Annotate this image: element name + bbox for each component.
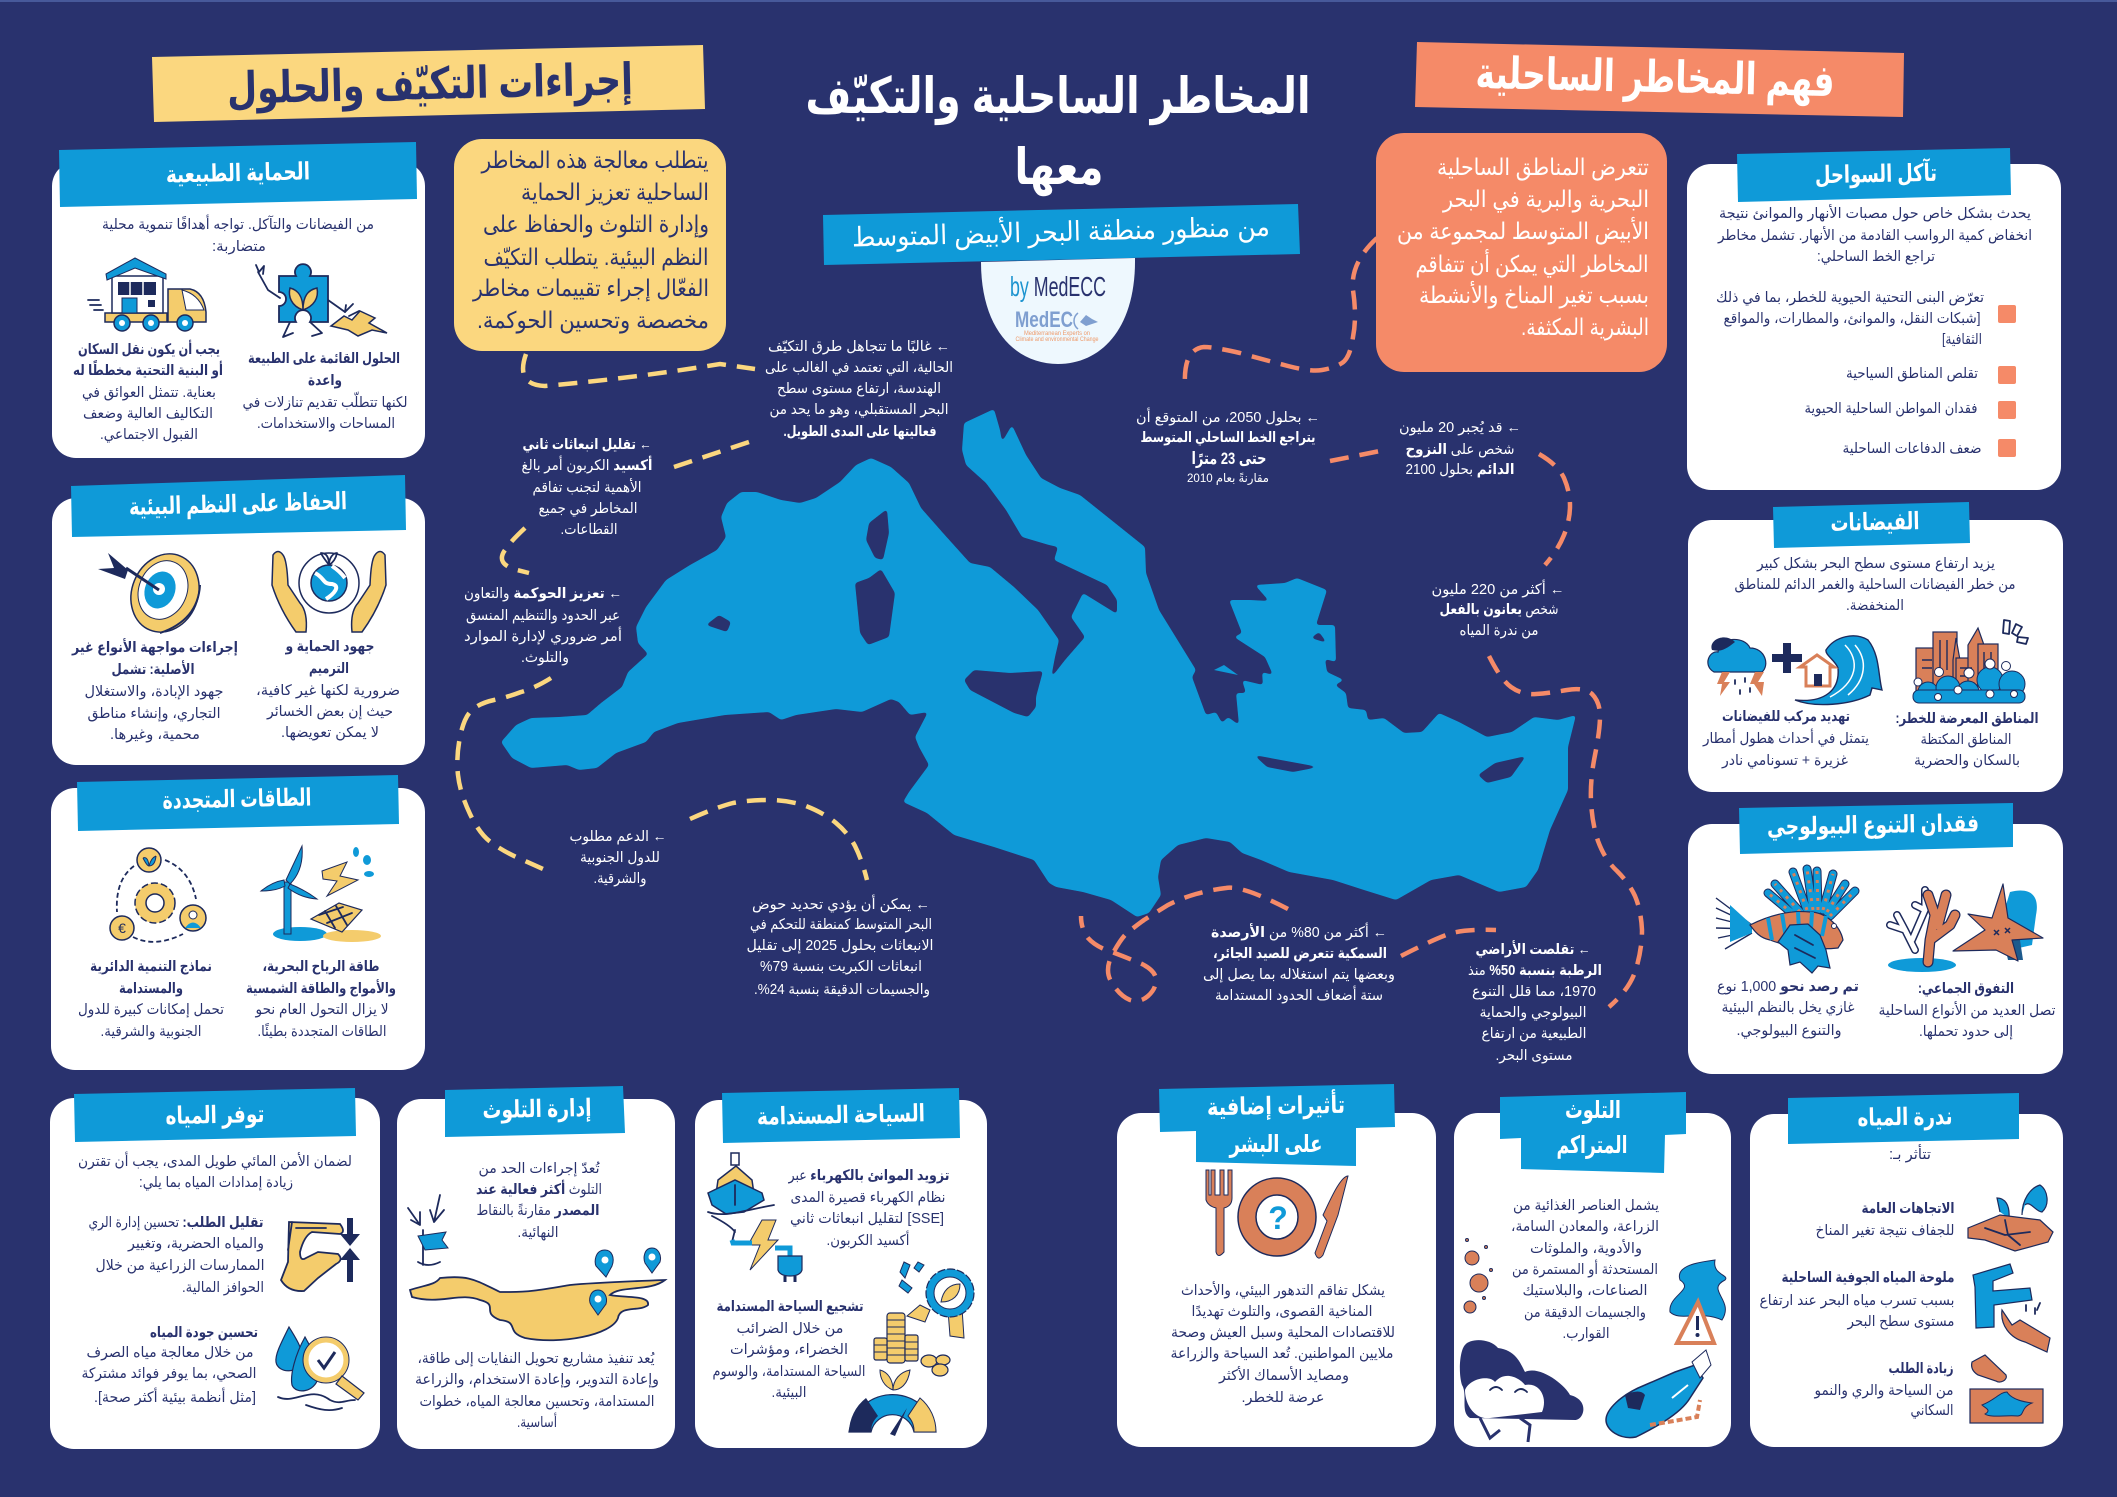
panel: natural protection: أو البنية التحتية مخططًا له xyxy=(73,360,223,379)
panel: renewable energy: الجنوبية والشرقية. xyxy=(100,1024,202,1040)
panel: floods: المناطق المكتظة xyxy=(1920,732,2012,748)
icon: crowded city xyxy=(1913,620,2028,703)
callout: wetlands: مستوى البحر. xyxy=(1496,1048,1572,1064)
panel: ecosystem conservation: لا يمكن تعويضها. xyxy=(281,725,379,741)
panel: floods: غزيرة + تسونامي نادر xyxy=(1721,753,1848,769)
icon: coral and starfish xyxy=(1888,884,2043,972)
callout: adaptation limits: الحالية، التي تعتمد في الغالب على xyxy=(765,360,953,376)
callout: fish stocks: وبعضها يتم استغلاله بما يصل إلى xyxy=(1203,967,1395,983)
panel: biodiversity loss xyxy=(1688,803,2063,1074)
panel: water scarcity: الاتجاهات العامة xyxy=(1862,1201,1954,1217)
panel: water availability: الحوافز المالية. xyxy=(182,1280,264,1296)
panel: ecosystem conservation xyxy=(52,475,425,765)
panel: water scarcity: تتأثر بـ: xyxy=(1889,1144,1931,1163)
panel: natural protection: واعدة xyxy=(308,373,342,389)
panel: renewable energy: الطاقات المتجددة xyxy=(162,784,312,815)
panel: ecosystem conservation: الأصلية: تشمل xyxy=(112,660,194,678)
callout: wetlands: البيولوجي والحماية xyxy=(1480,1005,1586,1021)
panel: pollution management: إدارة التلوث xyxy=(482,1095,592,1124)
panel: additional human impacts xyxy=(1117,1084,1436,1447)
dashed connectors: adaptation xyxy=(457,354,867,880)
callout: governance: عبر الحدود والتنظيم المنسق xyxy=(466,608,620,624)
icon: plastic bottle and straw xyxy=(1606,1350,1711,1438)
panel: adaptation intro: وإدارة التلوث والحفاظ على xyxy=(483,211,709,238)
icon: black pollution cloud xyxy=(1460,1340,1583,1442)
logo: by MedECC xyxy=(981,258,1135,364)
logo: by MedECC: Climate and environmental Change xyxy=(1016,337,1099,343)
panel: floods: من خطر الفيضانات الساحلية والغمر الدائم للمناطق xyxy=(1734,577,2016,593)
panel: pollution management xyxy=(397,1086,675,1449)
panel: natural protection: القبول الاجتماعي. xyxy=(100,427,198,443)
callout: wetlands: ← تقلصت الأراضي xyxy=(1476,940,1590,958)
panel: pollution management: أساسية. xyxy=(517,1412,557,1431)
panel: pollution management: المستدامة، وتحسين معالجة المياه، خطوات xyxy=(420,1394,654,1410)
icon: circular economy cycle xyxy=(110,848,206,942)
icon: heavy metal particles xyxy=(1464,1238,1492,1313)
icon: house on truck xyxy=(88,258,206,331)
panel: water availability: توفر المياه xyxy=(165,1101,265,1130)
panel: renewable energy: والأمواج والطاقة الشمسية xyxy=(246,979,396,997)
panel: water scarcity: ملوحة المياه الجوفية الساحلية xyxy=(1782,1270,1954,1286)
callout: fish stocks xyxy=(1203,922,1395,1004)
panel: ecosystem conservation: جهود الإبادة، والاستغلال xyxy=(84,684,224,700)
panel: pollution management: النهائية. xyxy=(518,1225,558,1241)
panel: renewable energy: تحمل إمكانات كبيرة للدول xyxy=(78,1002,224,1018)
panel: natural protection: متضاربة: xyxy=(212,239,266,255)
panel: pollution management: وإعادة التدوير، وإعادة الاستخدام، والزراعة xyxy=(415,1372,659,1388)
panel: biodiversity loss: إلى حدود تحملها. xyxy=(1919,1024,2013,1040)
panel: floods: المنخفضة. xyxy=(1846,598,1904,614)
panel: floods: يتمثل في أحداث هطول أمطار xyxy=(1702,728,1869,747)
panel: water scarcity: للجفاف نتيجة تغير المناخ xyxy=(1816,1223,1954,1239)
panel: coastal risks intro: بسبب تغير المناخ والأنشطة xyxy=(1419,281,1649,309)
panel: water availability: من خلال معالجة مياه الصرف xyxy=(86,1345,254,1361)
panel: additional human impacts: تأثيرات إضافية xyxy=(1207,1089,1345,1121)
panel: coastal risks intro: البحرية والبرية في البحر xyxy=(1442,186,1649,213)
panel: ecosystem conservation: إجراءات مواجهة الأنواع غير xyxy=(71,638,238,656)
panel: floods: المناطق المعرضة للخطر: xyxy=(1896,711,2038,727)
icon: pollution spill with pins xyxy=(408,1195,665,1340)
callout: governance: أمر ضروري لإدارة الموارد xyxy=(464,626,622,645)
panel: water availability xyxy=(50,1088,380,1449)
panel: sustainable tourism: [SSE] لتقليل انبعاثات ثاني xyxy=(790,1211,944,1227)
panel: coastal risks intro: الأبيض المتوسط لمجموعة من xyxy=(1397,217,1649,245)
panel: ecosystem conservation: الحفاظ على النظم البيئية xyxy=(129,488,347,521)
panel: cumulative pollution: المتراكم xyxy=(1556,1132,1628,1159)
callout: adaptation limits: الهندسة، ارتفاع مستوى سطح xyxy=(777,381,941,397)
panel: coastal erosion: تآكل السواحل xyxy=(1815,158,1937,189)
icon: drought soil and plant xyxy=(1968,1185,2053,1251)
panel: adaptation intro xyxy=(454,139,726,351)
callout: wetlands: الطبيعية من ارتفاع xyxy=(1482,1026,1586,1042)
panel: floods: الفيضانات xyxy=(1830,508,1920,537)
map: Mediterranean Sea xyxy=(501,409,1576,917)
panel: additional human impacts: على البشر xyxy=(1229,1131,1322,1158)
panel: cumulative pollution: القوارب. xyxy=(1562,1326,1610,1342)
panel: floods: تهديد مركب للفيضانات xyxy=(1722,709,1850,725)
panel: renewable energy: لا يزال التحول العام نحو xyxy=(255,1002,388,1018)
panel: water scarcity: زيادة الطلب xyxy=(1888,1361,1954,1377)
callout: shoreline retreat: مقارنةً بعام 2010 xyxy=(1187,471,1269,486)
list: erosion impacts xyxy=(1716,290,2016,457)
panel: ecosystem conservation: التجاري، وإنشاء مناطق xyxy=(88,706,220,722)
callout: emission control area: انبعاثات الكبريت بنسبة 79% xyxy=(760,959,922,975)
panel: cumulative pollution: والجسيمات الدقيقة من xyxy=(1524,1305,1646,1321)
subtitle banner xyxy=(823,204,1300,265)
callout: displacement: ← قد يُجبر 20 مليون xyxy=(1399,420,1521,436)
panel: natural protection: بعناية. تتمثل العوائق في xyxy=(82,385,216,401)
panel: coastal risks intro xyxy=(1376,133,1667,372)
panel: sustainable tourism xyxy=(695,1088,987,1448)
icon: empty plate and cutlery: ? xyxy=(1268,1200,1288,1236)
panel: water scarcity: مستوى سطح البحر xyxy=(1847,1314,1954,1330)
callout: fish stocks: السمكية تتعرض للصيد الجائر، xyxy=(1213,946,1387,962)
panel: renewable energy: طاقة الرياح البحرية، xyxy=(262,959,380,975)
panel: pollution management: التلوث أكثر فعالية عند xyxy=(476,1180,602,1198)
callout: support: ← الدعم مطلوب xyxy=(570,829,666,845)
icon: gauge with sprout xyxy=(849,1370,936,1436)
panel: water availability: الصحي، بما يوفر فوائد مشتركة xyxy=(82,1366,256,1382)
panel: water availability: الممارسات الزراعية من خلال xyxy=(96,1258,264,1274)
panel: water scarcity: ندرة المياه xyxy=(1857,1103,1953,1132)
list: erosion impacts: تعرّض البنى التحتية الحيوية للخطر، بما في ذلك xyxy=(1716,290,1984,306)
callout: shoreline retreat: ← بحلول 2050، من المتوقع أن xyxy=(1136,407,1320,426)
callout: shoreline retreat: يتراجع الخط الساحلي المتوسط xyxy=(1140,430,1316,446)
icon: storm plus wave xyxy=(1708,636,1882,705)
panel: sustainable tourism: السياحة المستدامة، والوسوم xyxy=(712,1364,866,1380)
heading: adaptation actions: إجراءات التكيّف والحلول xyxy=(226,55,634,115)
panel: water availability: والمياه الحضرية، وتغيير xyxy=(127,1236,264,1252)
panel: cumulative pollution xyxy=(1454,1092,1731,1447)
icon: target and dart xyxy=(98,544,211,642)
panel: cumulative pollution: التلوث xyxy=(1565,1097,1621,1124)
panel: renewable energy: نماذج التنمية الدائرية xyxy=(90,959,212,975)
callout: governance: ← تعزيز الحوكمة والتعاون xyxy=(464,586,622,602)
callout: adaptation limits: فعاليتها على المدى الطويل. xyxy=(784,424,936,440)
panel: water availability: [مثل أنظمة بيئية أكثر صحة]. xyxy=(94,1387,256,1406)
panel: biodiversity loss: تصل العديد من الأنواع الساحلية xyxy=(1878,1001,2056,1019)
panel: renewable energy: والمستدامة xyxy=(119,981,183,997)
icon: lionfish xyxy=(1716,869,1855,973)
callout: fish stocks: ← أكثر من 80% من الأرصدة xyxy=(1211,922,1387,941)
panel: sustainable tourism: الخضراء، ومؤشرات xyxy=(730,1342,848,1358)
callout: emission control area: البحر المتوسط كمنطقة للتحكم في xyxy=(750,917,932,933)
panel: water scarcity xyxy=(1750,1093,2063,1447)
panel: ecosystem conservation: ضرورية لكنها غير كافية، xyxy=(256,683,400,699)
panel: natural protection: يجب أن يكون نقل السكان xyxy=(78,340,220,358)
callout: water scarcity: شخص يعانون بالفعل xyxy=(1440,602,1558,618)
callout: CO2 reduction: الأهمية لتجنب تفاقم xyxy=(532,478,642,496)
panel: water scarcity: بسبب تسرب مياه البحر عند ارتفاع xyxy=(1760,1293,1954,1309)
heading: adaptation actions xyxy=(152,45,705,122)
callout: displacement xyxy=(1399,420,1521,478)
panel: additional human impacts: ملايين المواطنين. تُعد السياحة والزراعة xyxy=(1170,1346,1394,1362)
panel: sustainable tourism: أكسيد الكربون. xyxy=(826,1230,910,1249)
panel: water scarcity: السكاني xyxy=(1910,1403,1954,1419)
icon: warning and toxic smoke xyxy=(1670,1260,1726,1343)
panel: floods: بالسكان والحضرية xyxy=(1914,753,2020,769)
panel: coastal erosion: تراجع الخط الساحلي: xyxy=(1817,249,1935,265)
callout: displacement: الدائم بحلول 2100 xyxy=(1406,462,1514,478)
icon: empty plate and cutlery xyxy=(1206,1170,1348,1258)
callout: emission control area: والجسيمات الدقيقة بنسبة 24%. xyxy=(754,982,930,998)
panel: adaptation intro: مخصصة وتحسين الحوكمة. xyxy=(477,307,709,334)
callout: support: للدول الجنوبية xyxy=(580,850,660,866)
panel: natural protection: الحماية الطبيعية xyxy=(166,158,310,189)
panel: sustainable tourism: السياحة المستدامة xyxy=(757,1100,925,1131)
panel: natural protection: المساحات والاستخدامات. xyxy=(257,416,395,432)
panel: biodiversity loss: والتنوع البيولوجي. xyxy=(1736,1023,1842,1039)
panel: cumulative pollution: الزراعة، والمعادن السامة، xyxy=(1511,1219,1659,1235)
panel: natural protection: الحلول القائمة على الطبيعة xyxy=(248,351,400,367)
icon: salt shaker and spill xyxy=(1970,1355,2043,1423)
panel: renewable energy: الطاقات المتجددة بطيئًا. xyxy=(258,1023,386,1040)
panel: sustainable tourism: من خلال الضرائب xyxy=(736,1321,844,1337)
panel: cumulative pollution: المستحدثة أو المستمرة من xyxy=(1512,1259,1658,1278)
panel: adaptation intro: يتطلب معالجة هذه المخاطر xyxy=(481,147,708,174)
callout: emission control area: ← يمكن أن يؤدي تحديد حوض xyxy=(752,894,930,913)
callout: CO2 reduction: ← تقليل انبعاثات ثاني xyxy=(522,437,652,453)
panel: natural protection xyxy=(52,142,425,458)
list: erosion impacts: [شبكات النقل، والموانئ، والمطارات، والمواقع xyxy=(1724,311,1980,327)
callout: water scarcity xyxy=(1432,579,1564,639)
callout: support xyxy=(570,829,666,887)
icon: coin stacks xyxy=(874,1313,950,1376)
callout: shoreline retreat: حتى 23 مترًا xyxy=(1192,449,1266,469)
panel: additional human impacts: عرضة للخطر. xyxy=(1242,1390,1324,1406)
callout: adaptation limits: ← غالبًا ما تتجاهل طرق التكيّف xyxy=(768,339,950,355)
icon: tap and hand xyxy=(1973,1264,2050,1352)
panel: cumulative pollution: يشمل العناصر الغذائية من xyxy=(1513,1198,1659,1214)
title: معها xyxy=(1014,139,1104,197)
callout: emission control area: الانبعاثات بحلول 2025 إلى تقليل xyxy=(746,938,934,954)
panel: natural protection: التكاليف العالية وضعف xyxy=(83,406,213,422)
logo: by MedECC: by MedECC xyxy=(1010,271,1106,302)
list: erosion impacts: تقلص المناطق السياحية xyxy=(1846,366,1978,382)
callout: displacement: شخص على النزوح xyxy=(1406,442,1514,458)
panel: floods xyxy=(1688,502,2063,792)
panel: ecosystem conservation: جهود الحماية و xyxy=(285,639,374,655)
callout: CO2 reduction: القطاعات. xyxy=(560,522,618,538)
subtitle banner: من منظور منطقة البحر الأبيض المتوسط xyxy=(852,209,1270,253)
logo: by MedECC: Mediterranean Experts on xyxy=(1024,331,1090,337)
panel: biodiversity loss: غازي يخل بالنظم البيئية xyxy=(1722,1000,1855,1016)
dashed connectors: risks xyxy=(1081,238,1642,1007)
callout: water scarcity: ← أكثر من 220 مليون xyxy=(1432,579,1564,598)
list: erosion impacts: ضعف الدفاعات الساحلية xyxy=(1842,441,1982,457)
callout: shoreline retreat xyxy=(1136,407,1320,486)
callout: wetlands: 1970، مما قلل التنوع xyxy=(1472,984,1596,1000)
title: المخاطر الساحلية والتكيّف xyxy=(806,68,1310,126)
panel: natural protection: لكنها تتطلّب تقديم تنازلات في xyxy=(242,391,408,411)
panel: water availability: لضمان الأمن المائي طويل المدى، يجب أن تقترن xyxy=(78,1151,352,1170)
icon: hands protecting earth xyxy=(272,552,386,632)
heading: understanding coastal risks xyxy=(1415,42,1904,117)
panel: additional human impacts: ومصايد الأسماك الأكثر xyxy=(1218,1366,1349,1384)
panel: additional human impacts: للاقتصادات المحلية وسبل العيش وصحة xyxy=(1171,1325,1395,1341)
panel: ecosystem conservation: حيث إن بعض الخسائر xyxy=(266,704,393,720)
panel: renewable energy xyxy=(51,775,425,1070)
panel: water availability: زيادة إمدادات المياه بما يلي: xyxy=(139,1175,293,1191)
panel: biodiversity loss: التفوق الجماعي: xyxy=(1918,981,2014,997)
panel: adaptation intro: الساحلية تعزيز الحماية xyxy=(521,179,709,206)
panel: coastal risks intro: تتعرض المناطق الساحلية xyxy=(1437,154,1649,181)
icon: circular economy cycle: € xyxy=(118,920,126,936)
icon: puzzle nature solution xyxy=(256,264,387,337)
heading: understanding coastal risks: فهم المخاطر الساحلية xyxy=(1475,49,1835,107)
callout: governance: والتلوث. xyxy=(521,650,569,666)
panel: pollution management: يُعد تنفيذ مشاريع تحويل النفايات إلى طاقة، xyxy=(418,1351,655,1367)
panel: coastal erosion: يحدث بشكل خاص حول مصبات الأنهار والموانئ نتيجة xyxy=(1719,204,2031,222)
callout: wetlands: الرطبة بنسبة 50% منذ xyxy=(1468,963,1602,979)
callout: adaptation limits xyxy=(765,339,953,440)
icon: ship with electric plug xyxy=(708,1153,802,1282)
list: erosion impacts: الثقافية] xyxy=(1942,332,1982,348)
callout: CO2 reduction: أكسيد الكربون أمر بالغ xyxy=(522,455,652,474)
icon: eco award badge xyxy=(899,1262,974,1338)
title xyxy=(806,68,1310,197)
panel: water scarcity: من السياحة والري والنمو xyxy=(1814,1383,1954,1399)
callout: wetlands xyxy=(1468,940,1602,1064)
icon: water drops and magnifier xyxy=(276,1327,364,1410)
panel: ecosystem conservation: الترميم xyxy=(309,661,349,677)
panel: sustainable tourism: تشجيع السياحة المستدامة xyxy=(716,1299,864,1315)
panel: coastal risks intro: المخاطر التي يمكن أن تتفاقم xyxy=(1416,249,1648,278)
panel: coastal erosion xyxy=(1687,148,2061,490)
panel: water availability: تحسين جودة المياه xyxy=(150,1325,258,1341)
panel: ecosystem conservation: محمية، وغيرها. xyxy=(110,727,200,743)
callout: emission control area xyxy=(746,894,934,998)
callout: adaptation limits: البحر المستقبلي، وهو ما يحد من xyxy=(770,402,948,418)
panel: coastal erosion: انخفاض كمية الرواسب القادمة من الأنهار. تشمل مخاطر xyxy=(1717,226,2032,244)
callout: fish stocks: ستة أضعاف الحدود المستدامة xyxy=(1215,985,1383,1004)
callout: water scarcity: من ندرة المياه xyxy=(1460,623,1538,639)
panel: adaptation intro: الفعّال إجراء تقييمات مخاطر xyxy=(472,275,709,302)
list: erosion impacts: فقدان المواطن الساحلية الحيوية xyxy=(1804,401,1978,417)
panel: pollution management: تُعدّ إجراءات الحد من xyxy=(478,1161,600,1177)
icon: wind turbine and solar panel xyxy=(261,846,381,942)
panel: additional human impacts: يشكل تفاقم التدهور البيئي، والأحداث xyxy=(1181,1281,1385,1299)
callout: support: والشرقية. xyxy=(594,871,646,887)
panel: biodiversity loss: فقدان التنوع البيولوجي xyxy=(1767,810,1979,841)
panel: floods: يزيد ارتفاع مستوى سطح البحر بشكل كبير xyxy=(1756,556,1995,572)
callout: governance xyxy=(464,586,622,666)
panel: sustainable tourism: البيئية. xyxy=(772,1385,806,1401)
callout: CO2 reduction xyxy=(522,437,652,538)
panel: cumulative pollution: والأدوية، والملوثات xyxy=(1530,1239,1642,1257)
panel: natural protection: من الفيضانات والتآكل. تواجه أهدافًا تنموية محلية xyxy=(102,214,374,233)
panel: water availability: تقليل الطلب: تحسين إدارة الري xyxy=(88,1215,263,1231)
panel: cumulative pollution: الصناعات، والبلاستيك xyxy=(1522,1283,1648,1299)
panel: additional human impacts: المناخية القصوى، والتلوث تهديدًا xyxy=(1192,1304,1372,1320)
panel: sustainable tourism: تزويد الموانئ بالكهرباء عبر xyxy=(788,1168,950,1184)
logo: by MedECC: MedEC xyxy=(1015,307,1073,332)
callout: CO2 reduction: المخاطر في جميع xyxy=(538,501,638,517)
panel: biodiversity loss: تم رصد نحو 1,000 نوع xyxy=(1717,979,1859,995)
panel: pollution management: المصدر مقارنةً بالنقاط xyxy=(476,1203,600,1219)
panel: adaptation intro: النظم البيئية. يتطلب التكيّف xyxy=(484,244,708,271)
panel: sustainable tourism: نظام الكهرباء قصيرة المدى xyxy=(790,1190,946,1206)
panel: coastal risks intro: البشرية المكثفة. xyxy=(1521,314,1649,341)
icon: hand pinching xyxy=(281,1218,360,1291)
